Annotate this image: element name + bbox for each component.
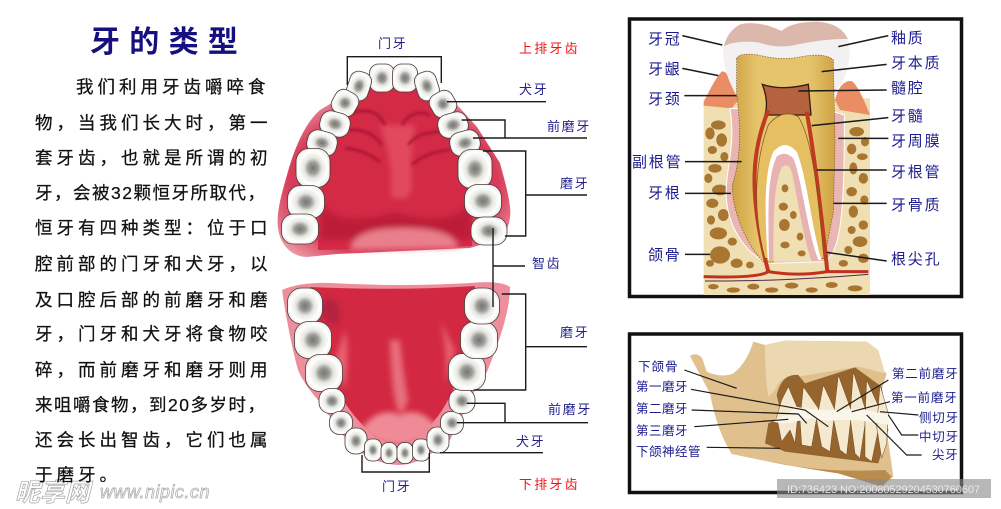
panel frame [630,19,962,296]
lower dental arch [282,282,510,465]
jaw labels: 侧切牙 [919,411,959,425]
jaw labels: 尖牙 [932,448,959,462]
spongy bone spots [704,120,869,293]
root canals [754,110,827,272]
spongy bone [765,367,888,463]
arch labels: 前磨牙 [548,402,592,417]
arch labels: 前磨牙 [547,119,591,134]
title: 牙的类型 [90,26,247,59]
body text: 来咀嚼食物，到20多岁时， [35,395,269,415]
arch labels: 犬牙 [516,434,545,449]
body text: 套牙齿，也就是所谓的初 [35,148,272,168]
blood vessels [704,272,868,277]
body text: 腔前部的门牙和犬牙，以 [35,254,272,274]
body text: 牙，门牙和犬牙将食物咬 [35,324,272,344]
jaw panel frame [630,334,962,492]
upper teeth [282,64,507,245]
mandible [690,341,893,487]
tooth labels: 牙根管 [891,164,941,181]
jaw labels [636,359,959,462]
white dome layer [766,145,822,260]
bone in dome [773,165,812,262]
body text: 物，当我们长大时，第一 [35,113,272,133]
jaw bone [704,98,870,295]
tooth labels: 牙周膜 [891,133,941,150]
tooth labels: 牙髓 [891,108,925,125]
arch labels: 上排牙齿 [519,41,580,56]
upper gum [278,95,510,257]
palate shading [320,125,472,250]
arch labels: 门牙 [378,36,407,51]
enamel [723,39,850,98]
watermark site logo: www.nipic.cn [100,482,210,502]
tooth labels: 牙根 [648,185,682,202]
periodontal membrane [726,108,844,263]
watermark id bar: ID:736423 NO:20080529204530760607 [787,484,980,496]
pink dome layer [768,154,818,260]
leader lines [684,370,922,455]
arch labels: 下排牙齿 [519,477,580,492]
bone spots in dome [779,184,806,256]
jaw labels: 中切牙 [919,429,959,444]
tooth labels: 釉质 [891,30,925,47]
jaw labels: 第一磨牙 [636,380,688,394]
upper palate [318,75,472,250]
panel: tooth anatomy [630,19,962,296]
jaw labels: 下颌骨 [638,359,679,374]
body text: 还会长出智齿，它们也属 [35,430,272,450]
body text [35,77,272,485]
panel: jaw teeth [630,334,962,492]
lower gum [282,282,510,465]
arch labels: 犬牙 [519,82,548,97]
bone edge [768,460,892,487]
watermark site logo [15,479,210,507]
watermark site logo: 昵享网 [15,479,94,507]
tooth labels: 牙骨质 [891,197,941,214]
tooth labels: 髓腔 [891,80,925,97]
jaw labels: 第二前磨牙 [892,366,959,381]
arch leader lines [347,57,588,472]
tooth labels: 根尖孔 [891,251,941,268]
arch labels: 磨牙 [560,325,589,340]
body text: 我们利用牙齿嚼啐食 [76,77,270,97]
upper dental arch [278,64,510,257]
tongue area shading [320,298,455,445]
tooth cross-section [682,22,888,295]
tooth labels [632,30,941,268]
teeth roots [777,372,888,462]
watermark id bar [777,479,991,498]
lower teeth [288,288,500,464]
body text: 于磨牙。 [35,465,121,485]
tooth labels: 牙冠 [648,31,682,48]
leader lines [682,36,888,261]
arch labels: 智齿 [532,256,561,271]
pulp chamber [762,84,811,115]
arch labels [378,36,592,494]
body text: 恒牙有四种类型：位于口 [35,218,272,238]
jaw labels: 第三磨牙 [636,424,688,438]
tooth labels: 牙颈 [648,91,682,108]
tooth labels: 牙龈 [648,61,682,78]
jaw labels: 第二磨牙 [636,402,688,416]
inner root dome [757,114,824,258]
tooth labels: 颌骨 [648,247,682,264]
palate ridges [345,111,450,165]
body text: 及口腔后部的前磨牙和磨 [35,290,272,310]
gum right [835,81,870,115]
lower floor of mouth [310,286,475,444]
jaw illustration [684,341,922,487]
tooth labels: 副根管 [632,154,682,171]
arch labels: 门牙 [382,479,411,494]
jaw labels: 第一前磨牙 [891,390,958,405]
gum left [704,71,738,108]
dentin [732,54,835,263]
crown top [723,22,848,52]
body text: 牙，会被32颗恒牙所取代， [35,183,269,203]
tooth labels: 牙本质 [891,55,941,72]
jaw labels: 下颌神经管 [636,444,701,459]
teeth crowns [773,407,890,425]
upper bone highlight [765,341,885,397]
body text: 碎，而前磨牙和磨牙则用 [35,360,272,380]
arch labels: 磨牙 [560,176,589,191]
nerve line [705,274,868,281]
